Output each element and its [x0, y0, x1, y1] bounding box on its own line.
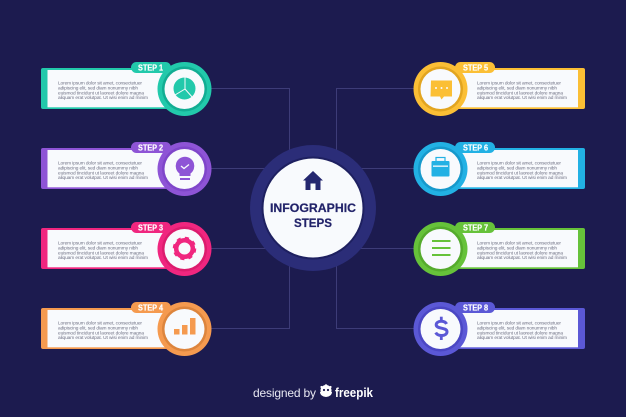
step 6 card: aliquam erat volutpat. Ut wisi enim ad minim	[477, 175, 567, 181]
step 5 card: aliquam erat volutpat. Ut wisi enim ad minim	[477, 95, 567, 101]
icon: briefcase	[432, 158, 450, 176]
step 4 card: euismod tincidunt ut laoreet dolore magna	[58, 330, 144, 336]
step 6 card: Lorem ipsum dolor sit amet, consectetuer	[477, 161, 561, 167]
step 1 card: adipiscing elit, sed diam nonummy nibh	[58, 86, 138, 92]
center hub: STEPS	[294, 218, 332, 230]
step 6 card	[414, 142, 585, 196]
step 1 card: euismod tincidunt ut laoreet dolore magna	[58, 90, 144, 96]
step 3 card	[41, 222, 212, 276]
step 6 card: STEP 6	[463, 143, 489, 152]
step 7 card: STEP 7	[463, 223, 489, 232]
step 2 card	[41, 142, 212, 196]
icon: house	[303, 171, 323, 190]
step 7 card	[414, 222, 585, 276]
icon: bar chart	[174, 318, 196, 334]
step 7 card: Lorem ipsum dolor sit amet, consectetuer	[477, 241, 561, 247]
step 4 card: aliquam erat volutpat. Ut wisi enim ad minim	[58, 335, 148, 341]
step 2 card: adipiscing elit, sed diam nonummy nibh	[58, 166, 138, 172]
step 2 card: euismod tincidunt ut laoreet dolore magna	[58, 170, 144, 176]
footer attribution: designed by	[253, 386, 316, 400]
step 5 card	[414, 62, 585, 116]
footer attribution: freepik	[335, 385, 374, 400]
icon: speech bubble	[430, 80, 452, 100]
step 8 card: aliquam erat volutpat. Ut wisi enim ad minim	[477, 335, 567, 341]
step 3 card: euismod tincidunt ut laoreet dolore magna	[58, 250, 144, 256]
step 6 card: adipiscing elit, sed diam nonummy nibh	[477, 166, 557, 172]
icon: freepik mascot	[320, 384, 332, 397]
step 8 card: STEP 8	[463, 303, 489, 312]
step 8 card: euismod tincidunt ut laoreet dolore magna	[477, 330, 563, 336]
step 4 card	[41, 302, 212, 356]
icon: gear	[174, 238, 195, 259]
icon: light bulb with check	[176, 157, 194, 180]
step 5 card: Lorem ipsum dolor sit amet, consectetuer	[477, 81, 561, 87]
step 1 card: aliquam erat volutpat. Ut wisi enim ad minim	[58, 95, 148, 101]
step 3 card: aliquam erat volutpat. Ut wisi enim ad minim	[58, 255, 148, 261]
step 3 card: Lorem ipsum dolor sit amet, consectetuer	[58, 241, 142, 247]
step 2 card: STEP 2	[138, 143, 164, 152]
hub title: INFOGRAPHIC	[270, 203, 356, 215]
step 2 card: Lorem ipsum dolor sit amet, consectetuer	[58, 161, 142, 167]
step 8 card: adipiscing elit, sed diam nonummy nibh	[477, 326, 557, 332]
step 5 card: adipiscing elit, sed diam nonummy nibh	[477, 86, 557, 92]
icon: dollar sign	[436, 317, 447, 340]
step 7 card: euismod tincidunt ut laoreet dolore magna	[477, 250, 563, 256]
center hub	[250, 145, 376, 271]
step 5 card: STEP 5	[463, 63, 489, 72]
step 3 card: adipiscing elit, sed diam nonummy nibh	[58, 246, 138, 252]
step 1 card: STEP 1	[138, 63, 164, 72]
icon: list lines	[432, 240, 450, 256]
footer attribution	[253, 384, 374, 400]
step 8 card: Lorem ipsum dolor sit amet, consectetuer	[477, 321, 561, 327]
step 2 card: aliquam erat volutpat. Ut wisi enim ad minim	[58, 175, 148, 181]
step 1 card: Lorem ipsum dolor sit amet, consectetuer	[58, 81, 142, 87]
step 7 card: adipiscing elit, sed diam nonummy nibh	[477, 246, 557, 252]
step 4 card: adipiscing elit, sed diam nonummy nibh	[58, 326, 138, 332]
icon: pie chart	[174, 77, 196, 100]
step 5 card: euismod tincidunt ut laoreet dolore magna	[477, 90, 563, 96]
step 6 card: euismod tincidunt ut laoreet dolore magna	[477, 170, 563, 176]
step 3 card: STEP 3	[138, 223, 164, 232]
step 4 card: Lorem ipsum dolor sit amet, consectetuer	[58, 321, 142, 327]
step 1 card	[41, 62, 212, 116]
step 4 card: STEP 4	[138, 303, 164, 312]
step 8 card	[414, 302, 585, 356]
step 7 card: aliquam erat volutpat. Ut wisi enim ad minim	[477, 255, 567, 261]
